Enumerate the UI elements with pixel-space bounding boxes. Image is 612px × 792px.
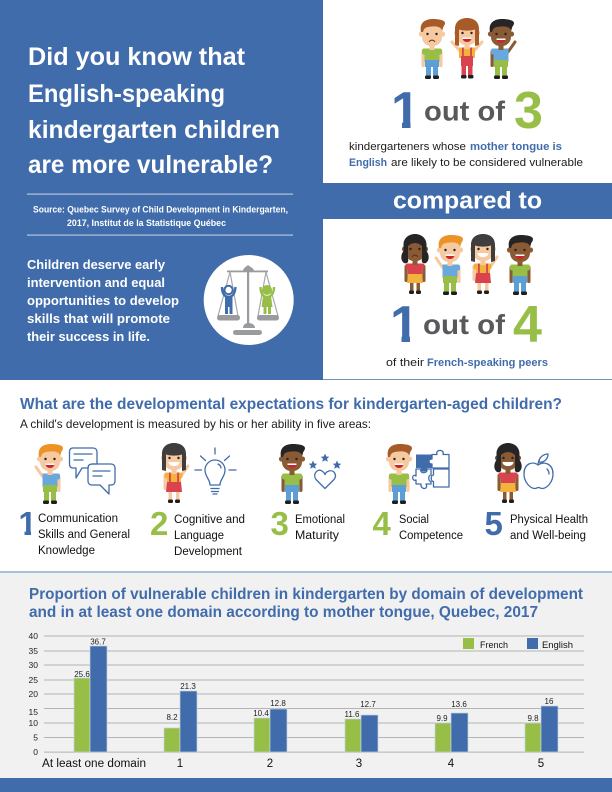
x axis labels: 5	[538, 758, 544, 770]
area 5: physical health: and Well-being	[510, 530, 586, 542]
legend: French	[480, 640, 508, 651]
area 2: cognitive and language: Language	[174, 530, 224, 542]
bars: domain 4: 9.9	[436, 714, 448, 723]
area 3: emotional maturity	[270, 444, 345, 542]
area 1: communication: 1	[18, 505, 37, 542]
area 3: emotional maturity: Emotional	[295, 514, 345, 526]
stat: 1 out of 3: 1	[391, 82, 420, 140]
text: five areas intro: A child's development is measured by his or her ability in five areas:	[20, 417, 371, 431]
bars: domain 2	[253, 699, 287, 752]
icon: puzzle pieces	[413, 450, 449, 488]
area 4: social competence: 4	[372, 505, 392, 542]
bars: at least one domain	[74, 638, 107, 752]
bars: domain 2: 12.8	[270, 699, 286, 708]
bars: domain 4	[435, 700, 468, 752]
stat: 1 out of 4: 4	[513, 296, 542, 354]
chart title	[29, 586, 584, 621]
group of three children: one sad	[419, 18, 515, 79]
title: kindergarten children	[28, 116, 280, 144]
intro text block	[27, 257, 179, 344]
y axis labels: 10	[29, 718, 38, 728]
area 5: physical health	[484, 443, 588, 542]
area 2: cognitive and language	[150, 443, 245, 558]
stat: 1 out of 4	[394, 306, 542, 342]
title: are more vulnerable?	[28, 151, 273, 179]
text: English vulnerability statement: mother tongue is	[470, 141, 562, 153]
intro text block: Children deserve early	[27, 257, 166, 272]
source note	[33, 205, 288, 228]
footer band	[0, 778, 612, 792]
bars: at least one domain: 25.6	[74, 670, 90, 679]
bars: domain 3: 12.7	[360, 700, 376, 709]
icon: heart and stars	[309, 454, 341, 488]
banner: compared to: compared to	[393, 188, 542, 214]
bars: domain 1: 8.2	[166, 713, 178, 722]
x axis labels: 3	[356, 758, 362, 770]
bars: domain 1: 21.3	[180, 682, 196, 691]
area 3: emotional maturity: 3	[270, 505, 289, 542]
text: French peers statement: of their	[386, 357, 424, 369]
area 1: communication: Communication	[38, 513, 118, 525]
icon: balance scale with two children	[204, 255, 294, 345]
source note: 2017, Institut de la Statistique Québec	[67, 218, 226, 228]
text: English vulnerability statement: are likely to be considered vulnerable	[391, 157, 583, 169]
y axis labels: 0	[33, 747, 38, 757]
icon: lightbulb	[195, 448, 236, 494]
text: English vulnerability statement	[349, 141, 583, 169]
intro text block: skills that will promote	[27, 311, 170, 326]
y axis labels: 20	[29, 689, 38, 699]
legend	[463, 638, 573, 651]
area 4: social competence: Social	[399, 514, 429, 526]
y axis labels: 40	[29, 631, 38, 641]
icon: apple	[524, 454, 553, 488]
area 3: emotional maturity: Maturity	[295, 530, 339, 542]
bars: domain 2: 10.4	[253, 709, 269, 718]
text: English vulnerability statement: English	[349, 157, 387, 169]
icon: speech bubbles	[70, 448, 115, 494]
bars: domain 4: 13.6	[451, 700, 467, 709]
area 1: communication: Knowledge	[38, 545, 95, 557]
bars: domain 5: 16	[545, 697, 554, 706]
bars: domain 1	[164, 682, 197, 752]
x axis labels: 1	[177, 758, 183, 770]
area 5: physical health: Physical Health	[510, 514, 588, 526]
group of four children: one sad	[401, 234, 533, 295]
y axis labels: 35	[29, 646, 38, 656]
stat: 1 out of 3	[394, 92, 542, 128]
stat: 1 out of 4: out of	[423, 309, 506, 340]
bars: domain 3: 11.6	[345, 710, 360, 719]
bars: domain 3	[345, 700, 378, 752]
text: French peers statement: French-speaking peers	[427, 357, 548, 369]
y axis labels: 25	[29, 675, 38, 685]
area 5: physical health: 5	[484, 505, 503, 542]
x axis labels	[42, 758, 544, 770]
y axis labels: 15	[29, 707, 38, 717]
source note: Source: Quebec Survey of Child Development in Kindergarten,	[33, 205, 288, 215]
x axis labels: At least one domain	[42, 758, 146, 770]
bar chart	[29, 631, 584, 770]
area 1: communication: Skills and General	[38, 529, 130, 541]
y axis labels: 5	[33, 732, 38, 742]
chart title: and in at least one domain according to mother tongue, Quebec, 2017	[29, 604, 538, 621]
intro text block: their success in life.	[27, 329, 150, 344]
bars: domain 5: 9.8	[527, 714, 539, 723]
heading: developmental expectations: What are the developmental expectations for kindergarten-aged children?	[20, 396, 562, 413]
x axis labels: 2	[267, 758, 273, 770]
stat: 1 out of 3: out of	[424, 96, 506, 126]
banner: compared to	[323, 183, 612, 219]
y axis labels	[29, 631, 38, 757]
area 2: cognitive and language: 2	[150, 505, 168, 542]
legend: English	[542, 640, 573, 651]
panel: chart section	[0, 571, 612, 778]
title: Did you know that	[28, 43, 246, 71]
stat: 1 out of 4: 1	[390, 296, 419, 354]
area 1: communication	[18, 444, 130, 557]
text: English vulnerability statement: kindergarteners whose	[349, 141, 466, 153]
stat: 1 out of 3: 3	[514, 82, 543, 140]
bars: domain 5	[525, 697, 558, 752]
title	[28, 43, 280, 179]
area 2: cognitive and language: Cognitive and	[174, 514, 245, 526]
intro text block: intervention and equal	[27, 275, 165, 290]
bars: at least one domain: 36.7	[90, 638, 106, 647]
intro text block: opportunities to develop	[27, 293, 179, 308]
title: English-speaking	[28, 80, 225, 108]
x axis labels: 4	[448, 758, 455, 770]
chart title: Proportion of vulnerable children in kindergarten by domain of development	[29, 586, 584, 603]
area 4: social competence: Competence	[399, 530, 463, 542]
y axis labels: 30	[29, 660, 38, 670]
area 2: cognitive and language: Development	[174, 546, 243, 558]
panel: blue intro panel	[0, 0, 323, 380]
area 4: social competence	[372, 444, 463, 542]
